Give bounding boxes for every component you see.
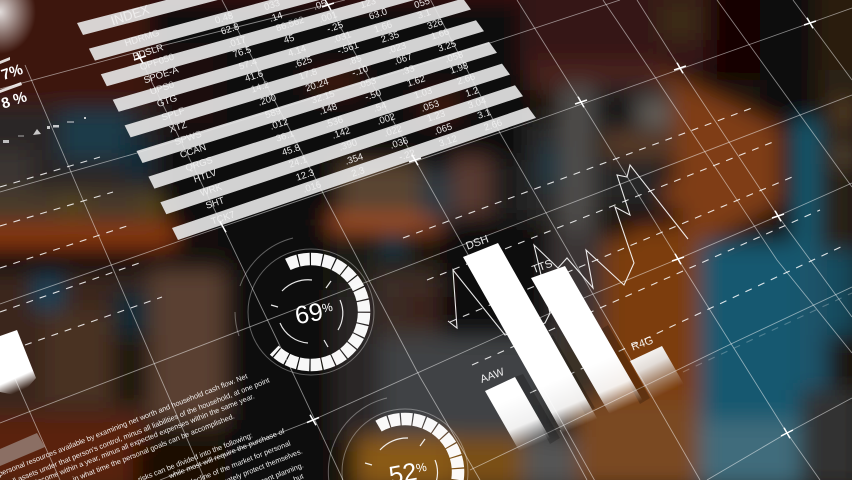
value column 2: 17.8 (298, 66, 319, 83)
percent value fragment: 8 % (0, 88, 29, 113)
ticker column: SPLF (160, 105, 186, 123)
value column 2: 86.562 (275, 15, 306, 34)
plus markers (134, 0, 816, 438)
value column 1: 0.48 (214, 10, 235, 27)
value column 2: .536 (324, 114, 345, 131)
ticker column: SPWS (173, 129, 203, 148)
text block: personal finance paragraph (0, 371, 305, 480)
value column 2: .390 (338, 137, 359, 154)
value column 5: 1.98 (449, 60, 470, 77)
value column 3 (312, 0, 417, 163)
value column 3: .053 (357, 75, 378, 92)
value column 5: 3.1 (416, 7, 432, 22)
ticker column: SHT (204, 195, 226, 212)
gauge: 69 percent (235, 238, 374, 375)
gauge segments (378, 419, 458, 480)
value column 3: -.22 (398, 148, 417, 163)
table header: INDEX: INDEX (109, 2, 152, 28)
value column 1: 57.4 (238, 56, 259, 73)
value column 2: 20.24 (304, 77, 330, 94)
value column 3: .001 (318, 9, 339, 26)
percent bar (0, 57, 10, 64)
value column 1: 45.8 (281, 142, 302, 159)
value column 5: .058 (444, 49, 465, 66)
value column 3: -.50 (364, 88, 383, 103)
value column 1: .016 (302, 179, 323, 196)
value column 1: 14.2 (250, 79, 271, 96)
gauge value: 69 (293, 298, 325, 330)
ticker column: CCAN (179, 142, 208, 161)
value column 2: .142 (331, 125, 352, 142)
value column 2: .14 (268, 10, 284, 25)
dashed lines (0, 108, 852, 393)
value column 1: 12.3 (295, 167, 316, 184)
value column 1 (214, 10, 323, 196)
value column 4: 1.03 (413, 85, 434, 102)
value column 5 (413, 0, 504, 134)
value column 2: .148 (318, 101, 339, 118)
value column 3: .54 (372, 100, 388, 115)
ticker column: UPS0 (149, 79, 176, 98)
value column 2 (263, 0, 366, 180)
gauge segments (274, 259, 364, 365)
value column 3: .022 (383, 123, 404, 140)
bar: TTS (531, 266, 695, 480)
value column 1: 41.6 (244, 68, 265, 85)
value column 4: 1.66 (373, 19, 394, 36)
value column 5: 2.66 (483, 117, 504, 134)
value column 1: 62.8 (220, 21, 241, 38)
value column 4: 1.23 (426, 108, 447, 125)
ticker column: TCK7 (210, 209, 236, 228)
value column 4: .067 (393, 51, 414, 68)
value column 3: .002 (376, 111, 397, 128)
ticker column (123, 28, 236, 228)
table row bands (77, 0, 536, 240)
value column 4: .065 (433, 121, 454, 138)
inner arcs and ticks (365, 438, 438, 480)
ticker column: OPF050 (139, 52, 176, 73)
bar label: AAW: AAW (479, 366, 507, 386)
value column 5: 326 (426, 17, 444, 32)
value column 4: .053 (420, 98, 441, 115)
bar: DSH (463, 243, 628, 480)
value column 3: .031 (332, 29, 353, 46)
bar label: R4G: R4G (630, 334, 655, 353)
table text (109, 0, 504, 228)
value column 3: -.10 (351, 64, 370, 79)
line chart (448, 165, 688, 335)
ticker column: WRK (199, 182, 224, 199)
bar: AAW (485, 377, 575, 480)
bar chart (463, 233, 702, 480)
ticker column: HTLV (192, 167, 219, 185)
value column 5: 1.66 (430, 26, 451, 43)
inner arcs and ticks (271, 280, 343, 347)
value column 2: 4.14 (287, 43, 308, 60)
value column 4: .023 (387, 40, 408, 57)
value column 4: 63.0 (368, 6, 389, 23)
ticker column: XTZ (168, 119, 189, 136)
value column 2: 45 (282, 33, 296, 46)
bar shadows (515, 325, 650, 444)
left white bar (0, 330, 36, 396)
ticker column: HDRMG (123, 28, 161, 49)
value column 2: 2.3 (350, 165, 366, 180)
lower left gray bar (0, 433, 45, 466)
gauge value: % (415, 460, 428, 475)
value column 2: .354 (344, 151, 365, 168)
value column 1: .200 (257, 92, 278, 109)
thin outer rings (235, 238, 374, 375)
value column 2: 32.15 (310, 89, 336, 106)
value column 4: 3.12 (438, 133, 459, 150)
value column 1: .012 (269, 116, 290, 133)
value column 5: 1.2 (464, 85, 480, 100)
value column 5: 3.04 (467, 95, 488, 112)
value column 4: 2.35 (380, 29, 401, 46)
ticker column: QRGS (184, 155, 214, 174)
value column 3: -.561 (336, 40, 360, 57)
value column 1: 36.1 (275, 128, 296, 145)
value column 4: .33 (400, 63, 416, 78)
value column 3: -.25 (326, 20, 345, 35)
value column 4: 1.62 (406, 73, 427, 90)
value column 3: .036 (389, 135, 410, 152)
value column 1: 589 (264, 106, 282, 121)
small mini chart marks (3, 117, 86, 143)
value column 4 (359, 0, 459, 150)
bar label: DSH: DSH (464, 233, 490, 253)
value column 1: 24.1 (288, 154, 309, 171)
value column 2: .625 (293, 54, 314, 71)
value column 1: 76.5 (232, 44, 253, 61)
gauge value: % (321, 300, 334, 315)
value column 3: .85 (347, 53, 363, 68)
ticker column: BDSLR (131, 42, 165, 63)
bar: R4G (630, 346, 702, 431)
thin outer rings (328, 398, 468, 480)
table: index rows (77, 0, 536, 240)
percent bar (0, 82, 22, 93)
paragraph two: while most will require the purchase of (166, 426, 287, 480)
value column 5: 3.25 (437, 38, 458, 55)
value column 5: 3.1 (476, 107, 492, 122)
ticker column: GTG (156, 93, 179, 110)
gauge: 52 percent (328, 398, 468, 480)
paragraph two (137, 426, 305, 480)
value column 1: .017 (227, 34, 248, 51)
value column 5: 2.66 (456, 71, 477, 88)
ticker column: SPOE-A (142, 64, 181, 86)
bar label: TTS: TTS (531, 258, 554, 276)
top left glow (0, 0, 36, 54)
left percentages (0, 57, 29, 113)
